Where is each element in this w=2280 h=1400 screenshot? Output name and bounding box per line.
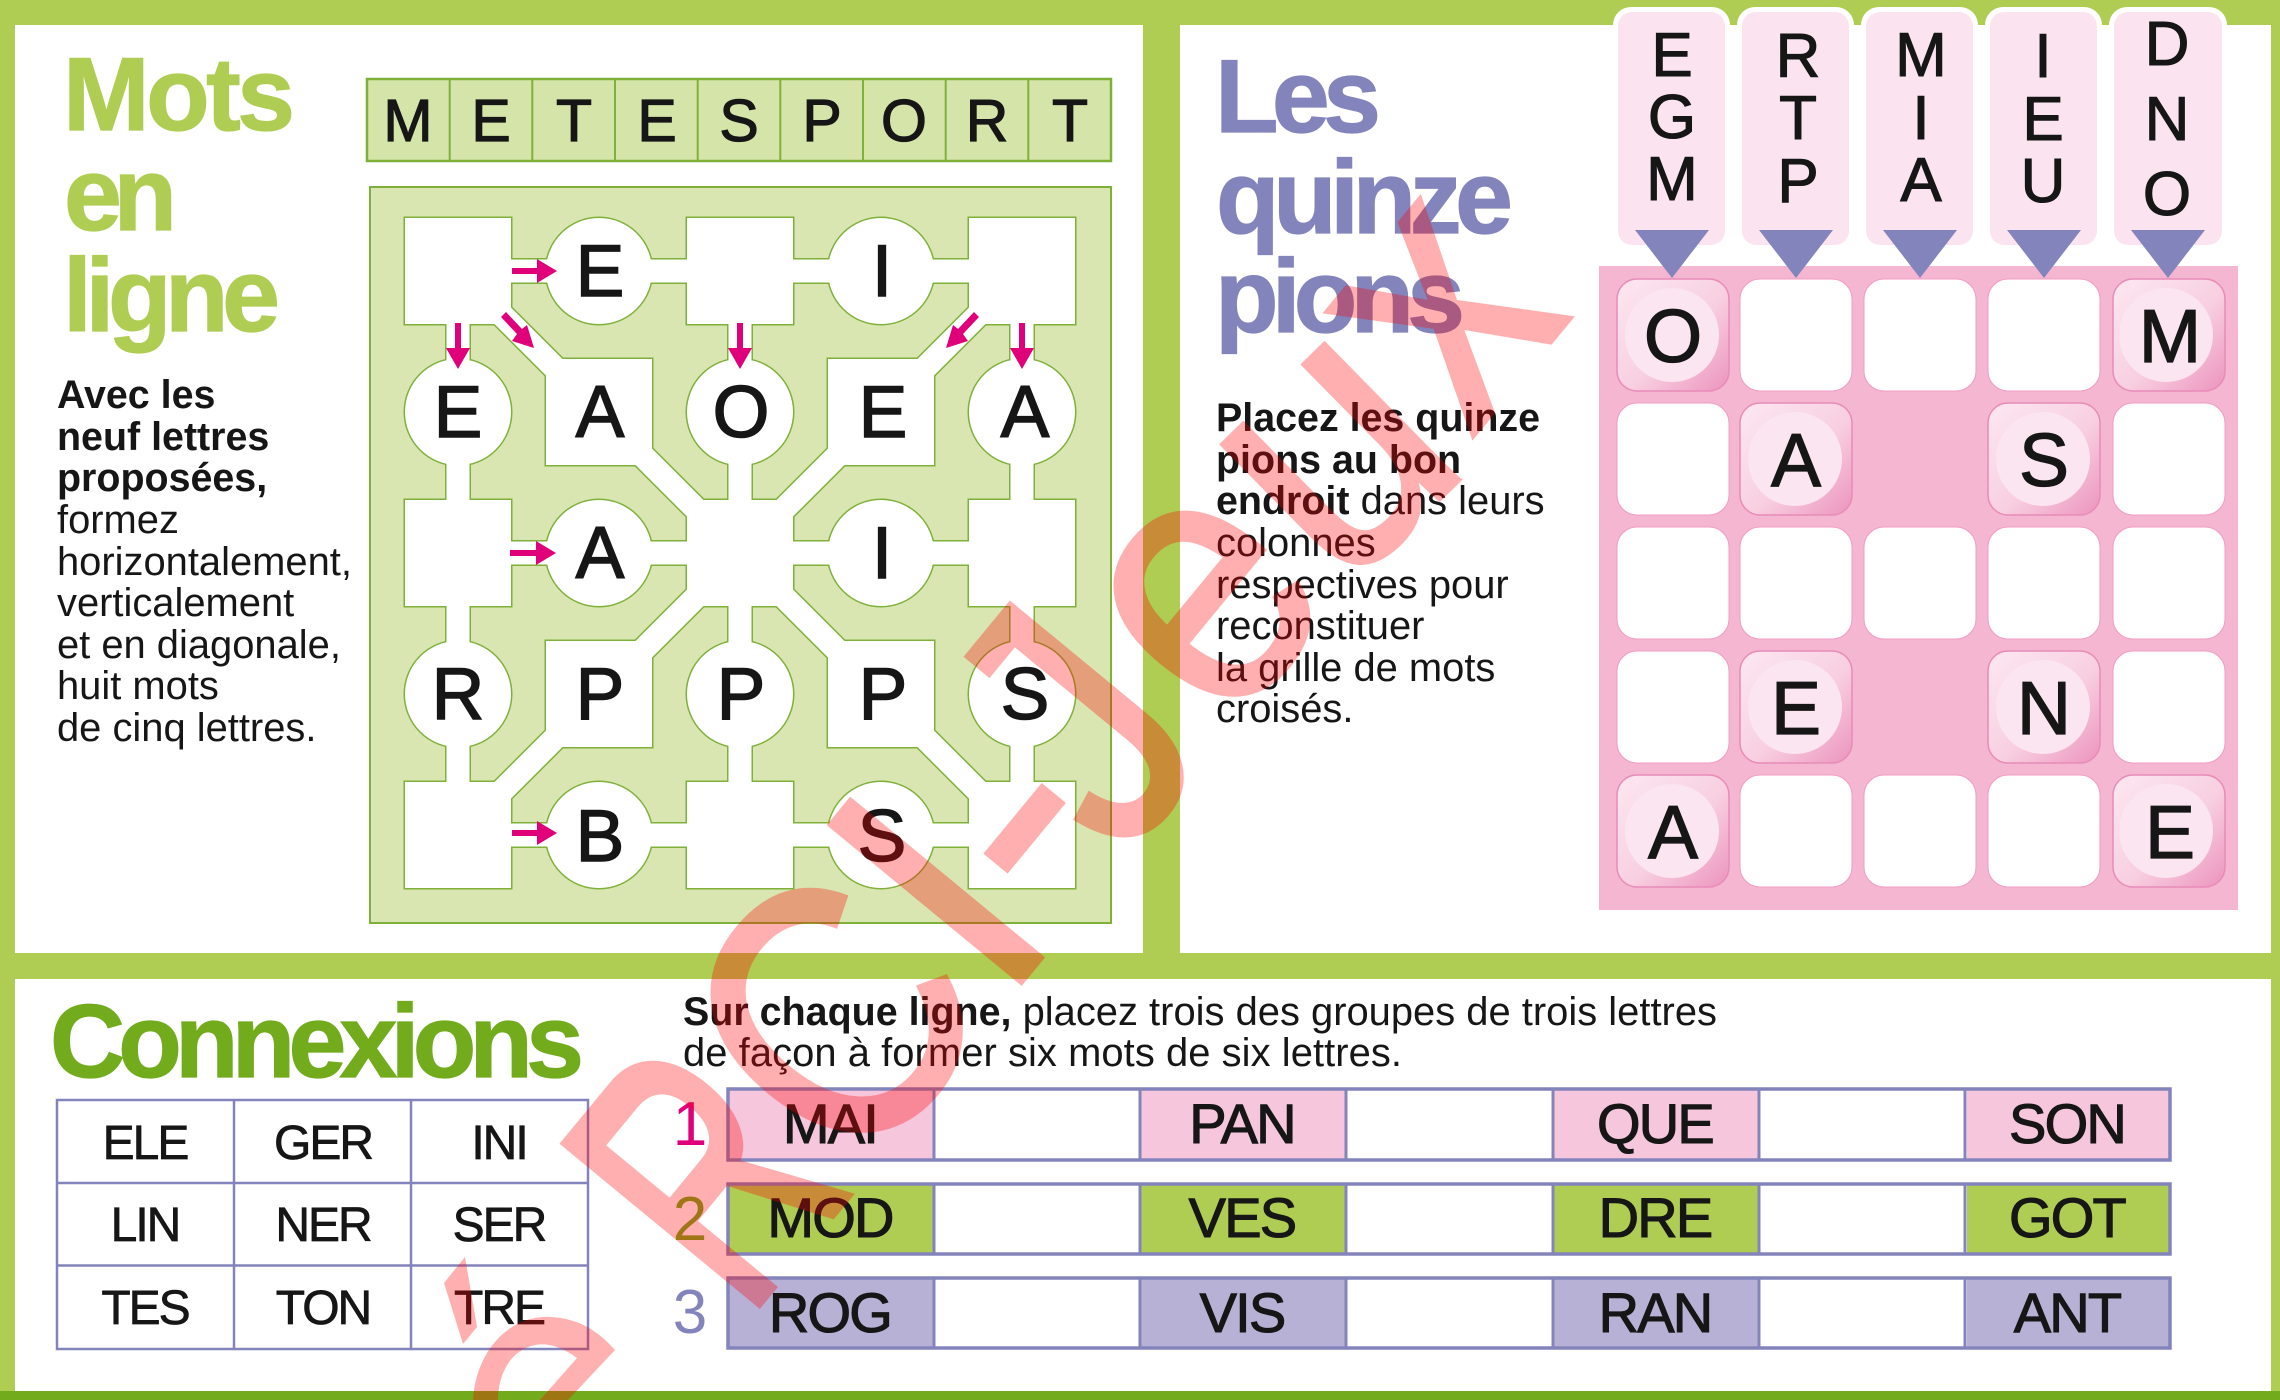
letter strip: METESPORT [367, 79, 1111, 161]
instructions: mots en ligne: verticalement [57, 581, 294, 625]
row 1: PAN [1189, 1092, 1295, 1155]
row 1: QUE [1597, 1092, 1713, 1155]
watermark: e [974, 386, 1401, 783]
instructions: les quinze pions [1216, 396, 1545, 731]
row 3: ANT [2014, 1281, 2121, 1344]
letter strip: METESPORT: S [719, 88, 759, 154]
letter strip: METESPORT: E [471, 88, 511, 154]
column tabs with letters: I [1912, 84, 1930, 153]
instructions: mots en ligne: de cinq lettres. [57, 706, 316, 750]
watermark: C [604, 800, 1062, 1234]
placed pawns: N [2017, 666, 2071, 750]
watermark: I [746, 722, 1124, 1059]
letter strip: METESPORT: E [637, 88, 677, 154]
puzzle: letter network: A [1001, 372, 1050, 453]
instructions: mots en ligne: Avec les [57, 373, 215, 417]
watermark: J [868, 537, 1277, 911]
table: letter groups [57, 1100, 588, 1349]
placed pawns: E [1771, 666, 1821, 750]
letter strip: METESPORT: T [1052, 88, 1088, 154]
instructions: les quinze pions: respectives pour [1216, 563, 1509, 607]
column tabs with letters: M [1646, 145, 1698, 214]
row 1 [673, 1089, 2171, 1160]
placed pawns [1617, 279, 2225, 887]
instructions: les quinze pions: colonnes [1216, 521, 1376, 565]
heading: les quinze pions: quinze [1216, 140, 1513, 256]
column tabs with letters: E [1651, 21, 1693, 90]
column tabs with letters: D [2145, 10, 2189, 79]
table: letter groups: TON [276, 1282, 370, 1335]
instructions: les quinze pions: Placez les quinze [1216, 396, 1540, 440]
arrows: column pointers [1635, 230, 2205, 278]
table: letter groups: NER [275, 1199, 371, 1252]
instructions: les quinze pions: reconstituer [1216, 604, 1424, 648]
letter strip: METESPORT: R [966, 88, 1008, 154]
watermark: cropped decorative fragment at the bottom edge [444, 1257, 615, 1400]
heading: mots en ligne: en [64, 137, 177, 253]
board: pink grid [1599, 266, 2238, 910]
heading: les quinze pions: pions [1215, 239, 1465, 355]
placed pawns: O [1644, 294, 1702, 378]
instructions: les quinze pions: croisés. [1216, 687, 1353, 731]
puzzle: letter network: S [1001, 654, 1049, 735]
puzzle: letter network: I [872, 513, 892, 594]
puzzle: letter network: A [576, 513, 625, 594]
column tabs with letters: R [1776, 22, 1820, 91]
column tabs with letters: T [1779, 84, 1817, 153]
heading: les quinze pions: Les [1215, 39, 1381, 155]
column tabs with letters [1613, 7, 2227, 278]
instructions: mots en ligne: horizontalement, [57, 540, 352, 584]
placed pawns: A [1648, 790, 1698, 874]
column tabs with letters: G [1648, 83, 1696, 152]
instructions: mots en ligne: proposées, [57, 456, 267, 500]
placed pawns: E [2145, 790, 2195, 874]
table: letter groups: INI [471, 1117, 527, 1170]
placed pawns: A [1771, 418, 1821, 502]
empty cells [1617, 279, 2225, 887]
puzzle: letter network: O [713, 372, 769, 453]
row 2: MOD [767, 1186, 893, 1249]
puzzle: letter network: P [859, 654, 907, 735]
row 1: MAI [783, 1092, 877, 1155]
column tabs with letters: U [2021, 147, 2065, 216]
table: letter groups: LIN [111, 1199, 179, 1252]
instructions: connexions: de façon à former six mots de six lettres. [683, 1031, 1402, 1075]
panel: connexions [15, 979, 2271, 1391]
instructions: connexions: Sur chaque ligne, placez trois des groupes de trois lettres [683, 990, 1717, 1034]
puzzle: letter network: B [576, 796, 624, 877]
puzzle: letter network: P [717, 654, 765, 735]
panel: les quinze pions [1180, 7, 2271, 953]
column tabs with letters: O [2143, 160, 2191, 229]
puzzle: letter network: E [576, 231, 624, 312]
table: letter groups: SER [453, 1199, 546, 1252]
instructions: les quinze pions: pions au bon [1216, 438, 1461, 482]
row 3: VIS [1200, 1281, 1284, 1344]
table: letter groups: TES [101, 1282, 189, 1335]
panel: mots en ligne [15, 25, 1143, 953]
puzzle: letter network: S [858, 796, 906, 877]
puzzle: letter network [370, 187, 1111, 923]
watermark [492, 106, 1647, 1380]
column tabs with letters: N [2145, 85, 2189, 154]
row 3: ROG [769, 1281, 891, 1344]
letter strip: METESPORT: O [881, 88, 927, 154]
row 2: GOT [2009, 1186, 2126, 1249]
puzzle: letter network: E [434, 372, 482, 453]
puzzle: letter network: R [432, 654, 484, 735]
heading: mots en ligne [63, 37, 295, 354]
instructions: mots en ligne: neuf lettres [57, 415, 269, 459]
instructions: mots en ligne: formez [57, 498, 179, 542]
row 3: 3 [673, 1278, 707, 1347]
row 3 [673, 1278, 2171, 1348]
row 2: VES [1189, 1186, 1295, 1249]
watermark: u [1110, 229, 1530, 652]
bottom band [0, 1391, 2280, 1400]
column tabs with letters: P [1777, 147, 1819, 216]
placed pawns: S [2019, 418, 2069, 502]
row 2 [673, 1184, 2171, 1254]
table: letter groups: TRE [454, 1282, 544, 1335]
letter strip: METESPORT: M [383, 88, 433, 154]
row 3: RAN [1599, 1281, 1711, 1344]
instructions: les quinze pions: la grille de mots [1216, 646, 1495, 690]
watermark: R [492, 978, 914, 1367]
puzzle: letter network: P [576, 654, 624, 735]
row 2: DRE [1599, 1186, 1711, 1249]
instructions: mots en ligne: et en diagonale, [57, 623, 341, 667]
puzzle: letter network: A [576, 372, 625, 453]
column tabs with letters: A [1900, 146, 1942, 215]
instructions: mots en ligne [57, 373, 352, 750]
placed pawns: M [2139, 294, 2201, 378]
letter strip: METESPORT: T [556, 88, 592, 154]
heading: mots en ligne: ligne [63, 238, 280, 354]
row 1: SON [2009, 1092, 2125, 1155]
column tabs with letters: I [2034, 22, 2052, 91]
arrows: entry points [446, 259, 1034, 845]
table: letter groups: GER [274, 1117, 372, 1170]
watermark: - [807, 634, 1197, 985]
heading: mots en ligne: Mots [63, 37, 295, 153]
puzzle: letter network: I [872, 231, 892, 312]
letter strip: METESPORT: P [802, 88, 842, 154]
table: letter groups: ELE [103, 1117, 187, 1170]
puzzle: letter network: E [859, 372, 907, 453]
row 2: 2 [673, 1185, 707, 1254]
watermark: x [1218, 107, 1632, 488]
heading: les quinze pions [1215, 39, 1513, 355]
instructions: connexions [683, 990, 1717, 1075]
instructions: les quinze pions: endroit dans leurs [1216, 479, 1545, 523]
column tabs with letters: E [2022, 85, 2064, 154]
instructions: mots en ligne: huit mots [57, 664, 219, 708]
row 1: 1 [673, 1090, 707, 1159]
column tabs with letters: M [1895, 21, 1947, 90]
heading: connexions: Connexions [50, 984, 584, 1100]
